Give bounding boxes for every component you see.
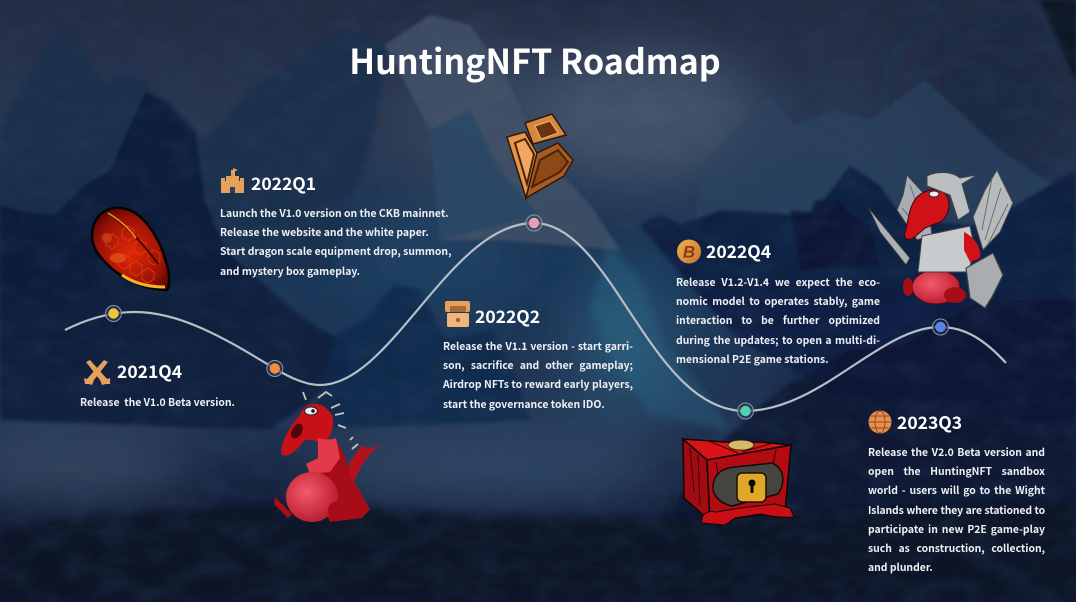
illustration: dragon scale bbox=[92, 208, 169, 290]
text: 2022Q1 description bbox=[220, 205, 451, 278]
illustration: armored dragon bbox=[868, 170, 1013, 308]
text: 2022Q4 description: Release V1.2-V1.4 we expect the eco- bbox=[676, 274, 880, 289]
icon: bitcoin coin: B bbox=[683, 242, 695, 262]
text: 2022Q1 description: Start dragon scale equipment drop, summon, bbox=[220, 243, 451, 258]
text: 2022Q1 description: Release the website and the white paper. bbox=[220, 224, 429, 239]
icon: treasure chest bbox=[445, 301, 470, 327]
node: 2022Q2 bbox=[526, 215, 542, 231]
text: 2022Q2 description: start the governance token IDO. bbox=[443, 396, 605, 411]
node: 2022Q1 bbox=[267, 360, 283, 376]
timeline curve bbox=[65, 223, 1006, 411]
text: 2022Q4 description bbox=[676, 274, 880, 366]
text: 2023Q3 description: and plunder. bbox=[868, 559, 933, 574]
text: 2021Q4 description: Release the V1.0 Beta version. bbox=[80, 394, 235, 409]
icon: globe bbox=[868, 410, 892, 434]
text: 2022Q2 description bbox=[443, 338, 633, 411]
illustration: copper shield bbox=[507, 114, 573, 198]
node: 2022Q4 bbox=[738, 403, 754, 419]
title: HuntingNFT Roadmap bbox=[349, 34, 721, 84]
icon: castle bbox=[221, 168, 244, 193]
text: 2022Q2 description: Release the V1.1 version - start garri- bbox=[443, 338, 633, 353]
heading: 2022Q1: 2022Q1 bbox=[251, 171, 316, 196]
text: 2022Q4 description: during the updates; to open a multi-di- bbox=[676, 332, 880, 347]
icon: crossed swords bbox=[84, 360, 110, 385]
text: 2022Q2 description: son, sacrifice and other gameplay; bbox=[443, 357, 633, 372]
text: 2022Q4 description: interaction to be further optimized bbox=[676, 312, 880, 327]
illustration: red dragon bbox=[274, 392, 380, 522]
heading: 2023Q3: 2023Q3 bbox=[897, 410, 962, 435]
text: 2023Q3 description: participate in new P2E game-play bbox=[868, 521, 1045, 536]
heading: 2022Q4: 2022Q4 bbox=[706, 239, 771, 264]
heading: 2021Q4: 2021Q4 bbox=[117, 359, 182, 384]
text: 2023Q3 description bbox=[868, 444, 1045, 574]
text: 2023Q3 description: such as construction, collection, bbox=[868, 540, 1045, 555]
text: 2023Q3 description: world - users will go to the Wight bbox=[868, 482, 1045, 497]
node: 2023Q3 bbox=[932, 319, 948, 335]
heading: 2022Q2: 2022Q2 bbox=[475, 304, 540, 329]
text: 2022Q4 description: nomic model to operates stably, game bbox=[676, 293, 880, 308]
text: 2022Q4 description: mensional P2E game stations. bbox=[676, 351, 829, 366]
text: 2022Q1 description: Launch the V1.0 version on the CKB mainnet. bbox=[220, 205, 449, 220]
text: 2023Q3 description: Release the V2.0 Beta version and bbox=[868, 444, 1045, 459]
icon: bitcoin coin bbox=[677, 240, 701, 264]
illustration: mimic treasure chest bbox=[683, 439, 794, 525]
text: 2022Q2 description: Airdrop NFTs to reward early players, bbox=[443, 376, 633, 391]
text: 2023Q3 description: Islands where they are stationed to bbox=[868, 502, 1045, 517]
text: 2022Q1 description: and mystery box gameplay. bbox=[220, 263, 360, 278]
node: 2021Q4 bbox=[106, 306, 122, 322]
text: 2023Q3 description: open the HuntingNFT sandbox bbox=[868, 463, 1045, 478]
